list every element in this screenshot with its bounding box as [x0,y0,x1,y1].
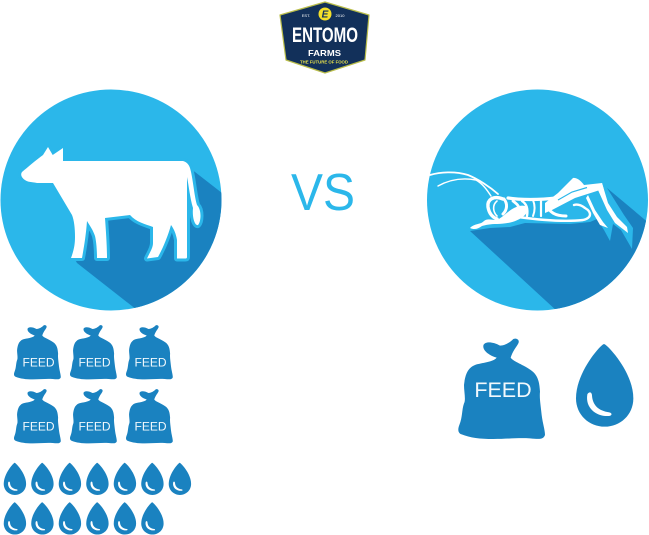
logo: Entomo Farms badge: EST. [302,13,310,18]
icon: feed bag 4 [14,389,61,443]
panel: cow circle [0,90,230,310]
icon: feed bag 6 [126,389,173,443]
icon: cricket [430,172,628,233]
icon: cow [21,147,200,258]
logo: Entomo Farms badge: FARMS [308,48,341,58]
icon: large feed bag, cricket [458,339,545,439]
water drops: cow [4,463,191,535]
logo: Entomo Farms badge: THE FUTURE OF FOOD [300,60,349,64]
feed bag labels: FEED [134,356,167,370]
heading: VS: VS [291,164,355,222]
feed bags: cow [14,325,173,443]
feed bag labels: FEED [22,420,55,434]
feed bag labels: FEED [22,356,55,370]
antennae and body lines [430,172,590,221]
cow long shadow [70,172,222,308]
cricket hind tibiae [598,183,628,233]
icon: feed bag 5 [70,389,117,443]
feed bag labels: FEED [78,356,111,370]
cricket hind femur [545,178,604,213]
icon: feed bag 1 [14,325,61,379]
cricket mouth and foreleg [470,206,528,229]
feed bag labels [22,356,167,434]
icon: feed bag 2 [70,325,117,379]
icon: feed bag 3 [126,325,173,379]
logo: Entomo Farms badge: 2010 [336,13,345,18]
feed bag labels: FEED [134,420,167,434]
feed bag labels: FEED [78,420,111,434]
cricket long shadow [470,188,649,312]
icon: large water drop, cricket [576,344,633,427]
panel: cricket circle [427,90,649,312]
logo: Entomo Farms badge: ENTOMO [292,23,358,47]
logo: Entomo Farms badge: E [322,10,329,20]
logo: Entomo Farms badge [280,2,369,73]
icon: large feed bag, cricket: FEED [474,378,532,402]
